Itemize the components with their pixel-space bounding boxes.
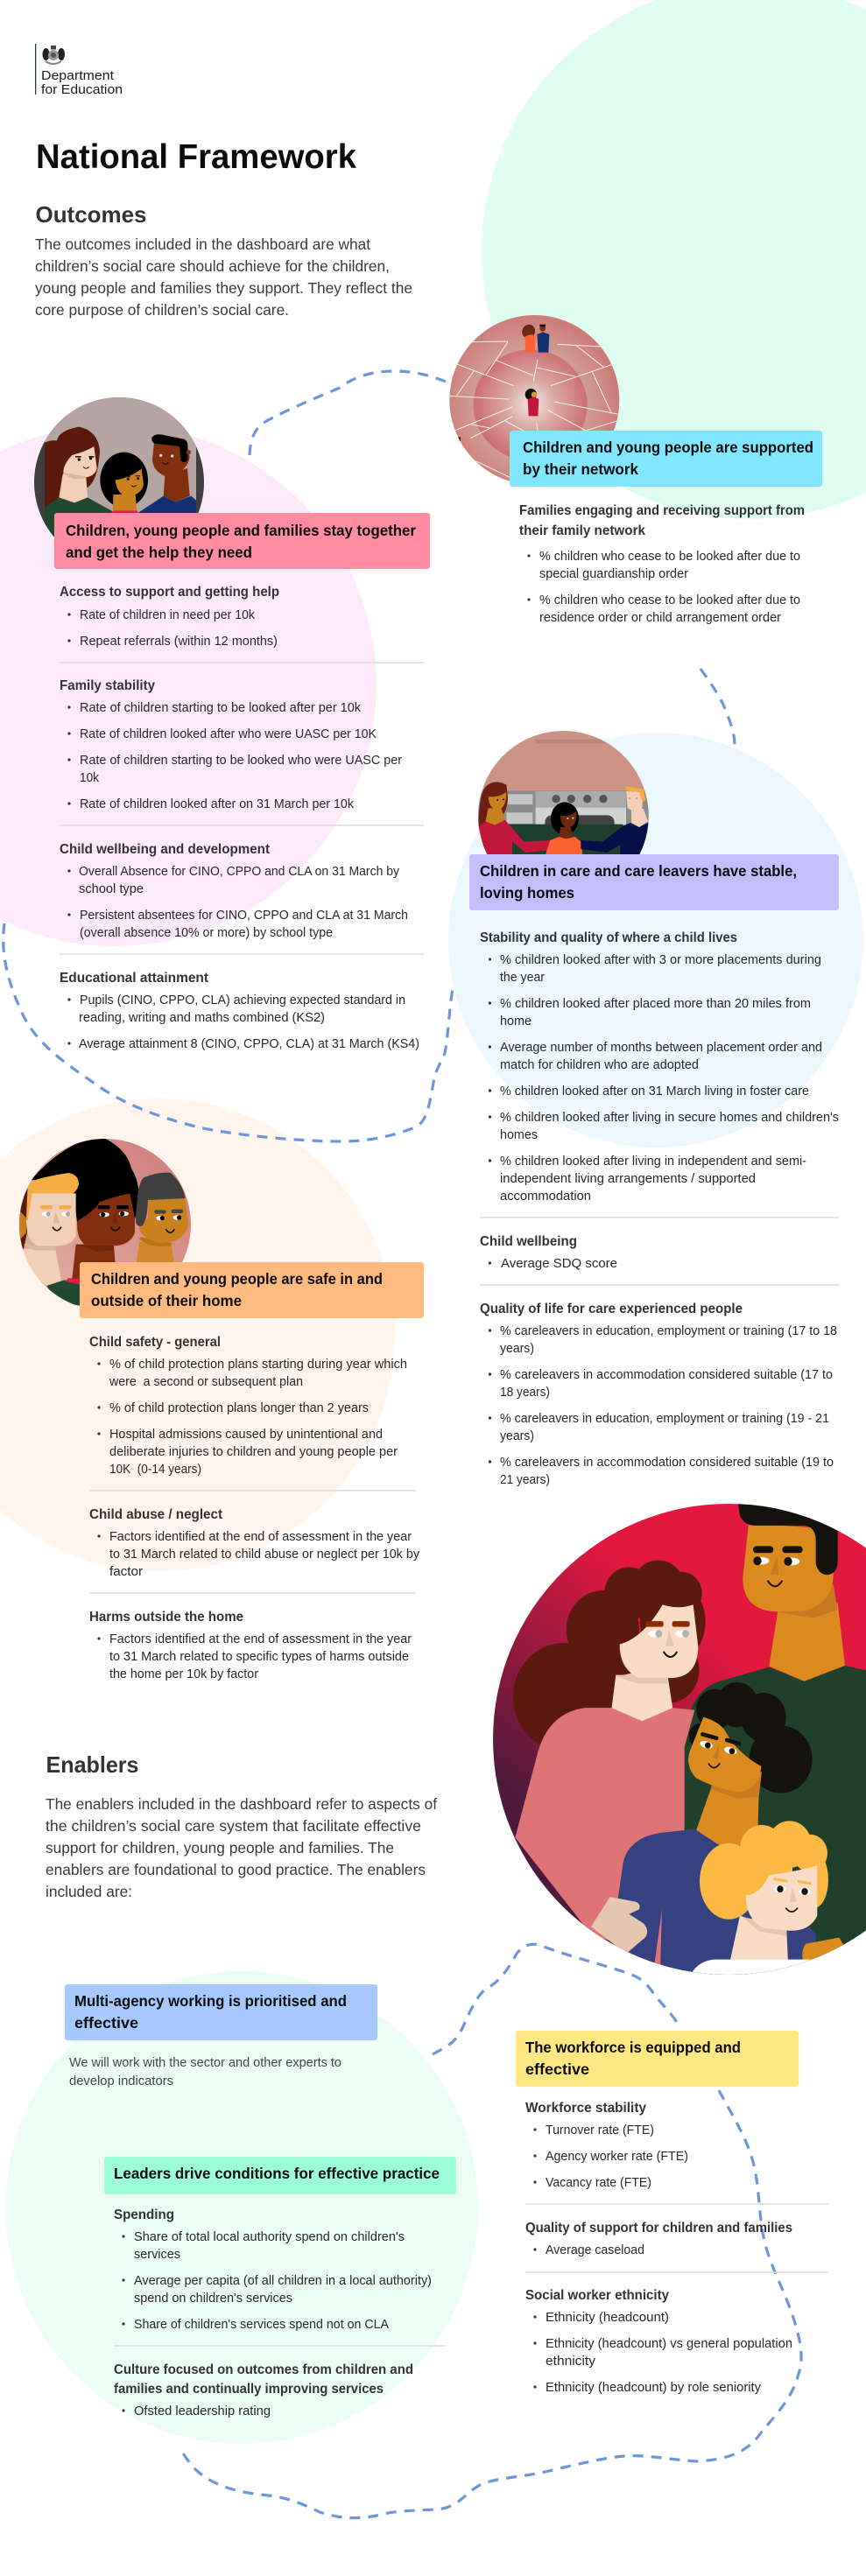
background circle: pink [0,425,377,946]
section: access to support: Rate of children in need per 10k [80,608,256,622]
section: quality of life: % careleavers in education, employment or training (19 - 21 [500,1412,829,1426]
illustration: large family circle [486,1497,866,1987]
section: quality of life: years) [500,1342,534,1356]
dashed connector: left loop [4,923,453,1141]
section: family stability: Rate of children starting to be looked who were UASC per [80,754,402,768]
section: social worker ethnicity: Ethnicity (headcount) [546,2311,669,2325]
heading: Enablers: Enablers [46,1751,138,1778]
section: social worker ethnicity: ethnicity [546,2355,596,2369]
section: access to support: Access to support and getting help [60,585,279,600]
panel: stable loving homes outcome [469,854,839,1487]
section: stability and quality [480,930,839,1204]
section: child abuse and neglect: factor [109,1565,143,1579]
section: stability and quality: % children looked after on 31 March living in foster care [500,1084,809,1098]
text block: enablers intro: support for children, young people and families. The [46,1839,394,1857]
text block: enablers intro [46,1795,437,1900]
illustration: care home kitchen circle [478,731,649,854]
title: National Framework [36,138,356,176]
section: stability and quality: % children looked after living in independent and semi- [500,1155,806,1169]
section: quality of life: % careleavers in accommodation considered suitable (19 to [500,1456,834,1470]
section: quality of life: Quality of life for care experienced people [480,1302,743,1316]
label: stable loving homes [469,854,839,910]
heading: families engaging [519,503,805,538]
section: child safety general: Hospital admissions caused by unintentional and [109,1428,383,1442]
section: family stability: Family stability [60,678,155,693]
section: child wellbeing and development [60,842,408,940]
section: harms outside the home: to 31 March related to specific types of harms outside [109,1650,409,1664]
background circle: light blue [448,733,863,1148]
label: safe in and outside home [80,1262,424,1318]
heading: Outcomes: Outcomes [35,201,147,228]
section: quality of life: 21 years) [500,1473,550,1487]
section: social worker ethnicity [525,2288,792,2395]
section: social worker ethnicity: Ethnicity (headcount) vs general population [546,2337,792,2351]
section: workforce stability: Turnover rate (FTE) [546,2123,654,2137]
panel: network outcome [510,431,822,625]
section: quality of life: % careleavers in accommodation considered suitable (17 to [500,1368,833,1382]
dashed connector: enablers top [433,1944,680,2054]
text block: outcomes intro: core purpose of children’s social care. [35,301,289,319]
section: stability and quality: home [500,1014,532,1028]
heading: families engaging: their family network [519,523,645,538]
text block: outcomes intro: The outcomes included in the dashboard are what [35,235,370,253]
section: stability and quality: accommodation [500,1190,591,1204]
section: child wellbeing and development: Persistent absentees for CINO, CPPO and CLA at 31 March [80,909,408,923]
section: workforce stability [525,2101,688,2190]
section: stability and quality: % children looked after placed more than 20 miles from [500,997,811,1011]
section: harms outside the home: Harms outside the home [89,1610,243,1625]
text block: outcomes intro: young people and families they support. They reflect the [35,279,412,297]
dashed connector: enablers bottom [180,2090,801,2518]
section: stability and quality: independent living arrangements / supported [500,1172,756,1186]
section: child wellbeing and development: (overall absence 10% or more) by school type [80,926,333,940]
section: quality of life [480,1302,837,1487]
section: child safety general: % of child protection plans longer than 2 years [109,1401,369,1415]
section: child safety general: % of child protection plans starting during year which [109,1358,407,1372]
section: spending: Share of children's services spend not on CLA [134,2318,389,2332]
label: children supported by network: by their network [523,460,638,478]
label: workforce equipped: effective [525,2060,589,2078]
logo: Department for Education [35,44,123,97]
panel: families stay together outcome [54,513,430,1051]
section: child safety general: 10K (0-14 years) [109,1463,201,1477]
panel: multi-agency enabler [65,1984,377,2088]
section: quality of life: % careleavers in education, employment or training (17 to 18 [500,1324,837,1338]
section: spending: services [134,2248,180,2262]
text block: outcomes intro: children’s social care should achieve for the children, [35,257,390,275]
bullet list: network indicators: % children who cease to be looked after due to [539,593,800,607]
section: child abuse and neglect [89,1507,420,1579]
dashed connector: family to network [250,371,450,455]
section: child safety general [89,1335,407,1477]
section: stability and quality: Stability and quality of where a child lives [480,930,737,945]
section: family stability: 10k [80,771,100,785]
section: educational attainment: reading, writing and maths combined (KS2) [79,1011,325,1025]
section: harms outside the home: the home per 10k by factor [109,1667,258,1681]
section: stability and quality: % children looked after with 3 or more placements during [500,953,821,967]
section: culture focused on outcomes: Culture focused on outcomes from children and [114,2362,413,2377]
section: spending: Share of total local authority spend on children's [134,2230,405,2244]
section: stability and quality: the year [500,971,545,985]
label: stable loving homes: Children in care and care leavers have stable, [480,862,797,880]
label: safe in and outside home: Children and young people are safe in and [91,1270,383,1288]
bullet list: network indicators: % children who cease to be looked after due to [539,550,800,564]
logo text [41,68,123,97]
label: children supported by network [510,431,822,487]
section: access to support: Repeat referrals (within 12 months) [80,635,278,649]
section: stability and quality: Average number of months between placement order and [500,1041,822,1055]
section: child safety general: Child safety - general [89,1335,221,1350]
section: educational attainment: Pupils (CINO, CPPO, CLA) achieving expected standard in [80,993,405,1007]
section: child wellbeing: Average SDQ score [501,1257,617,1271]
text block: enablers intro: enablers are foundational to good practice. The enablers [46,1861,426,1878]
text block: enablers intro: The enablers included in the dashboard refer to aspects of [46,1795,437,1813]
label: families stay together: and get the help they need [66,544,252,561]
section: harms outside the home: Factors identified at the end of assessment in the year [109,1632,412,1646]
illustration: family circle [34,397,204,537]
section: culture focused on outcomes: families and continually improving services [114,2382,384,2397]
section: social worker ethnicity: Ethnicity (headcount) by role seniority [546,2381,762,2395]
section: workforce stability: Workforce stability [525,2101,646,2116]
logo text: Department [41,68,115,83]
section: stability and quality: match for children who are adopted [500,1058,699,1072]
section: family stability: Rate of children starting to be looked after per 10k [80,701,362,715]
label: safe in and outside home: outside of their home [91,1292,242,1309]
background circle: pale green [5,1971,478,2444]
section: child abuse and neglect: Factors identified at the end of assessment in the year [109,1530,412,1544]
illustration: support network circle [449,315,620,481]
section: culture focused on outcomes: Ofsted leadership rating [134,2404,271,2418]
label: stable loving homes: loving homes [480,884,574,902]
panel: safe outcome [80,1262,424,1681]
section: family stability [60,678,402,811]
section: child wellbeing: Child wellbeing [480,1234,577,1249]
bullet list: network indicators: residence order or child arrangement order [539,611,781,625]
label: leaders drive conditions: Leaders drive conditions for effective practice [114,2165,440,2182]
section: family stability: Rate of children looked after on 31 March per 10k [80,797,355,811]
text block: enablers intro: the children’s social care system that facilitate effective [46,1817,421,1835]
label: families stay together: Children, young people and families stay together [66,522,416,539]
section: spending: Spending [114,2207,174,2222]
section: stability and quality: % children looked after living in secure homes and children's [500,1111,839,1125]
section: child wellbeing [480,1234,617,1271]
section: child wellbeing and development: school type [79,882,144,896]
section: educational attainment: Educational attainment [60,971,208,986]
section: quality of support [525,2221,792,2257]
text block: develop indicators: We will work with the sector and other experts to [69,2056,341,2070]
section: workforce stability: Agency worker rate (FTE) [546,2150,688,2164]
section: spending: spend on children's services [134,2292,292,2306]
label: families stay together [54,513,430,569]
section: social worker ethnicity: Social worker ethnicity [525,2288,669,2303]
label: multi-agency working: effective [74,2014,138,2032]
text block: enablers intro: included are: [46,1883,132,1900]
section: access to support [60,585,279,649]
text block: develop indicators: develop indicators [69,2074,173,2088]
panel: workforce enabler [516,2031,828,2395]
section: harms outside the home [89,1610,412,1681]
section: educational attainment [60,971,419,1051]
section: child wellbeing and development: Child wellbeing and development [60,842,270,857]
label: multi-agency working [65,1984,377,2040]
section: child safety general: deliberate injuries to children and young people per [109,1445,398,1459]
logo text: for Education [41,82,123,97]
background circle: mint top right [482,0,866,519]
section: family stability: Rate of children looked after who were UASC per 10K [80,727,377,741]
section: child abuse and neglect: Child abuse / neglect [89,1507,222,1522]
section: stability and quality: homes [500,1128,538,1142]
background circle: peach [0,1098,395,1571]
bullet list: network indicators [527,550,800,625]
label: multi-agency working: Multi-agency working is prioritised and [74,1992,347,2010]
section: child safety general: were a second or subsequent plan [109,1375,303,1389]
section: quality of support: Average caseload [546,2243,644,2257]
label: workforce equipped: The workforce is equipped and [525,2039,741,2056]
section: child wellbeing and development: Overall Absence for CINO, CPPO and CLA on 31 March by [79,865,400,879]
label: workforce equipped [516,2031,799,2087]
section: culture focused on outcomes [114,2362,413,2418]
text block: develop indicators [69,2056,341,2088]
section: child abuse and neglect: to 31 March related to child abuse or neglect per 10k by [109,1548,420,1562]
section: educational attainment: Average attainment 8 (CINO, CPPO, CLA) at 31 March (KS4) [79,1037,419,1051]
icon: royal crest [42,46,65,64]
bullet list: network indicators: special guardianship order [539,567,688,581]
illustration: young people circle [19,1139,191,1306]
text block: outcomes intro [35,235,412,319]
dashed connector: network to care [701,669,735,746]
section: quality of life: years) [500,1429,534,1443]
section: quality of life: 18 years) [500,1386,550,1400]
heading: families engaging: Families engaging and receiving support from [519,503,805,518]
panel: leaders enabler [104,2157,456,2418]
label: leaders drive conditions [104,2157,456,2194]
section: quality of support: Quality of support for children and families [525,2221,792,2236]
section: spending: Average per capita (of all children in a local authority) [134,2274,432,2288]
section: workforce stability: Vacancy rate (FTE) [546,2176,651,2190]
label: children supported by network: Children and young people are supported [523,439,813,456]
section: spending [114,2207,432,2332]
